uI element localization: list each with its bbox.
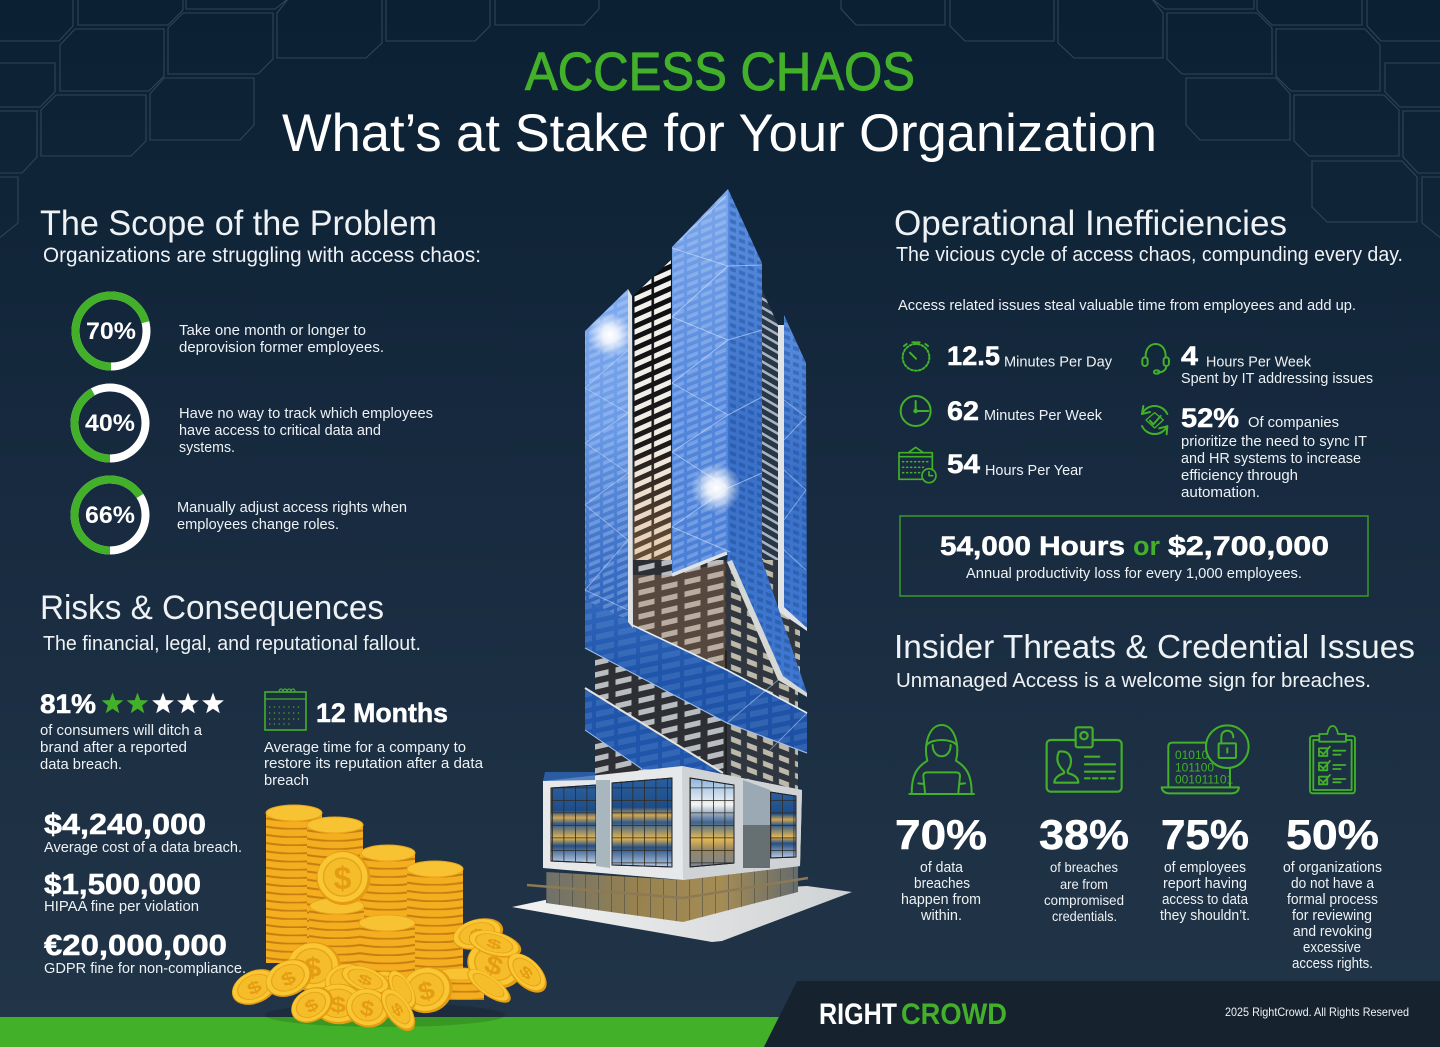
- stat: HIPAA fine: HIPAA fine per violation: [44, 898, 199, 915]
- icon: calendar: [265, 689, 306, 730]
- stat: 75% employees: they shouldn’t.: [1160, 908, 1250, 924]
- callout: annual productivity loss: or: [1133, 531, 1160, 561]
- stat: 52% of companies: [1181, 403, 1367, 501]
- stat: 81% with star rating: of consumers will ditch a: [40, 722, 203, 739]
- coin stack 6: [359, 915, 415, 993]
- stat: 75% employees: [1160, 811, 1250, 924]
- stat: 12.5 minutes per day: Minutes Per Day: [1004, 354, 1112, 370]
- callout: annual productivity loss: [900, 516, 1368, 596]
- icon: laptop with lock: 101100: [1175, 760, 1214, 774]
- donut stat: 66%: [74, 480, 146, 550]
- stat: 62 minutes per week: [947, 396, 1102, 426]
- stat: 38% credentials: credentials.: [1052, 908, 1117, 924]
- stat: 52% of companies: efficiency through: [1181, 467, 1298, 484]
- coin stack 7: [436, 968, 484, 1000]
- coin pile: $: [387, 1000, 407, 1019]
- subtitle line: What’s at Stake for Your Organization: [282, 104, 1157, 163]
- stat: HIPAA fine: [44, 869, 201, 915]
- illustration: gold coin stacks: [226, 805, 554, 1037]
- stat: 70% insider: [895, 811, 987, 924]
- icon: calendar with clock: [899, 447, 936, 483]
- icon: laptop with lock: 01010: [1175, 748, 1209, 762]
- text: 66% description: employees change roles.: [177, 516, 339, 533]
- icon: clock: [901, 396, 931, 426]
- logo: RightCrowd: RIGHT: [819, 998, 897, 1031]
- text: 70% description: deprovision former employees.: [179, 339, 384, 356]
- podium windows: [551, 778, 796, 867]
- callout: annual productivity loss: $2,700,000: [1168, 531, 1329, 561]
- stat: 52% of companies: automation.: [1181, 484, 1260, 501]
- illustration: skyscraper: [512, 189, 852, 942]
- stat: 12 months: [264, 698, 484, 789]
- stat: 50% organizations: [1283, 811, 1382, 972]
- coin pile: $: [305, 953, 321, 984]
- glass stair towers: [596, 780, 770, 868]
- heading: insider threats: Insider Threats & Credential Issues: [894, 628, 1415, 665]
- stat: HIPAA fine: $1,500,000: [44, 869, 201, 901]
- stat: 12.5 minutes per day: [947, 341, 1112, 371]
- logo: RightCrowd: [819, 998, 1007, 1031]
- text: 40% description: [179, 405, 433, 456]
- stat: 38% credentials: are from: [1060, 876, 1108, 892]
- text: 70% description: Take one month or longer to: [179, 322, 366, 339]
- stat: 54 hours per year: 54: [947, 449, 980, 479]
- glass wrap: lower band: [585, 688, 723, 773]
- ground floor glazing: [527, 865, 808, 922]
- stat: 12.5 minutes per day: 12.5: [947, 341, 1000, 371]
- donut stat: 70%: [76, 296, 146, 366]
- coin pile: $: [330, 993, 346, 1018]
- stat: 70% insider: of data: [920, 860, 964, 876]
- donut stat: 70%: 70%: [86, 318, 136, 345]
- coin pile: $: [485, 935, 503, 953]
- stat: 62 minutes per week: 62: [947, 396, 979, 426]
- stat: 52% of companies: and HR systems to increase: [1181, 450, 1361, 467]
- subheading: risks: The financial, legal, and reputational fallout.: [43, 633, 421, 655]
- subheading: scope: Organizations are struggling with access chaos:: [43, 244, 481, 267]
- icon: stopwatch: [903, 342, 929, 371]
- coin pile: $: [480, 950, 507, 982]
- stat: 81% with star rating: [40, 689, 224, 773]
- coin stack 2: [307, 817, 363, 975]
- subheading: operational inefficiencies: The vicious cycle of access chaos, compunding every day.: [896, 244, 1403, 266]
- text: 66% description: [177, 499, 407, 533]
- stat: 50% organizations: for reviewing: [1292, 908, 1372, 924]
- panel: the scope of the problem: [40, 204, 481, 550]
- stat: 50% organizations: formal process: [1287, 892, 1378, 908]
- stat: 4 hours per week: [1181, 341, 1373, 387]
- coin pile: $: [515, 963, 537, 984]
- donut stat: 40%: 40%: [85, 410, 135, 437]
- stat: 52% of companies: 52%: [1181, 403, 1239, 433]
- title line: Access Chaos: ACCESS CHAOS: [525, 42, 915, 102]
- icon: laptop with lock: [1162, 725, 1249, 793]
- icon: headset: [1142, 344, 1169, 374]
- heading: operational inefficiencies: Operational Inefficiencies: [894, 204, 1287, 243]
- stat: 62 minutes per week: Minutes Per Week: [984, 407, 1102, 424]
- stat: 52% of companies: Of companies: [1248, 414, 1339, 431]
- stat: 54 hours per year: [947, 449, 1083, 479]
- text: 40% description: Have no way to track which employees: [179, 405, 433, 422]
- coin pile: $: [302, 995, 322, 1017]
- stat: 81% with star rating: data breach.: [40, 756, 122, 773]
- heading: risks: Risks & Consequences: [40, 589, 384, 627]
- stat: 50% organizations: access rights.: [1292, 956, 1373, 972]
- text: 40% description: systems.: [179, 439, 235, 456]
- coin pile: $: [244, 976, 265, 999]
- white frame bars: [628, 289, 807, 631]
- stat: 12 months: restore its reputation after a data: [264, 755, 484, 772]
- coin pile: $: [278, 966, 299, 991]
- stat: 50% organizations: 50%: [1286, 811, 1379, 858]
- intro text: Access related issues steal valuable time from employees and add up.: [898, 298, 1356, 314]
- copyright: 2025 RightCrowd. All Rights Reserved: [1225, 1005, 1409, 1019]
- stat: GDPR fine: [44, 930, 246, 977]
- glass panel: central front face: [588, 189, 741, 575]
- upright dollar coin: $: [334, 860, 352, 896]
- coin stack 5: [309, 898, 364, 986]
- text: 70% description: [179, 322, 384, 356]
- glass panel: central side face: [727, 189, 807, 697]
- coin stack 3: [360, 845, 415, 973]
- stat: cost of a breach: [44, 809, 242, 856]
- coin pile: $: [356, 971, 375, 989]
- podium frame: [543, 766, 802, 880]
- glass wrap: left panel and band: [585, 289, 807, 753]
- coin pile: $: [468, 924, 487, 945]
- panel: risks and consequences: [40, 589, 484, 977]
- stat: 38% credentials: [1039, 811, 1129, 924]
- callout: annual productivity loss: 54,000 Hours: [940, 531, 1125, 561]
- stat: 50% organizations: excessive: [1303, 940, 1361, 956]
- stat: 50% organizations: of organizations: [1283, 860, 1382, 876]
- stat: 4 hours per week: 4: [1181, 341, 1198, 371]
- coin pile: $: [415, 975, 438, 1007]
- tower core lower floors: [595, 560, 798, 795]
- stat: 70% insider: within.: [920, 908, 962, 924]
- coin pile: $: [358, 995, 376, 1021]
- stat: 75% employees: 75%: [1161, 811, 1249, 858]
- base plate: [512, 886, 852, 942]
- stat: 70% insider: 70%: [895, 811, 987, 858]
- stat: 50% organizations: do not have a: [1291, 876, 1375, 892]
- stat: GDPR fine: GDPR fine for non-compliance.: [44, 960, 246, 977]
- stat: cost of a breach: $4,240,000: [44, 809, 206, 841]
- callout: annual productivity loss: Annual productivity loss for every 1,000 employees.: [966, 565, 1302, 582]
- subheading: insider threats: Unmanaged Access is a welcome sign for breaches.: [896, 669, 1371, 692]
- coin stack 4: [407, 861, 463, 999]
- icon: id badge: [1047, 727, 1122, 792]
- glass panel: far right: [784, 315, 807, 628]
- green footer band: [0, 1017, 779, 1047]
- stat: 38% credentials: compromised: [1044, 892, 1124, 908]
- heading: scope: The Scope of the Problem: [40, 204, 437, 243]
- stat: cost of a breach: Average cost of a data breach.: [44, 839, 242, 856]
- text: 66% description: Manually adjust access rights when: [177, 499, 407, 516]
- icon: laptop with lock: 001011101: [1175, 772, 1234, 786]
- logo: RightCrowd: CROWD: [901, 998, 1007, 1031]
- icon: hooded hacker: [909, 725, 974, 794]
- stat: 12 months: 12 Months: [316, 698, 448, 728]
- coin stack 1: [266, 805, 322, 963]
- icon: clipboard checklist: [1310, 726, 1355, 793]
- footer panel: [764, 981, 1440, 1047]
- panel: operational inefficiencies: [894, 204, 1403, 596]
- stat: 38% credentials: 38%: [1039, 811, 1129, 858]
- stat: 54 hours per year: Hours Per Year: [985, 462, 1083, 479]
- stat: 75% employees: access to data: [1162, 892, 1249, 908]
- stat: 75% employees: of employees: [1164, 860, 1246, 876]
- text: 40% description: have access to critical data and: [179, 422, 381, 439]
- stat: 4 hours per week: Spent by IT addressing issues: [1181, 370, 1373, 387]
- stat: 12 months: Average time for a company to: [264, 739, 466, 756]
- stat: 81% with star rating: 81%: [40, 689, 96, 719]
- stat: 38% credentials: of breaches: [1050, 859, 1118, 875]
- stat: 70% insider: happen from: [901, 892, 981, 908]
- coin pile: [226, 913, 554, 1037]
- stat: 4 hours per week: Hours Per Week: [1206, 354, 1311, 370]
- upright dollar coin: [316, 851, 370, 905]
- donut stat: 66%: 66%: [85, 502, 135, 529]
- stat: 70% insider: breaches: [914, 876, 970, 892]
- stat: 52% of companies: prioritize the need to sync IT: [1181, 433, 1367, 450]
- stat: 81% with star rating: brand after a reported: [40, 739, 187, 756]
- icon: sync check: [1142, 406, 1167, 434]
- stat: 50% organizations: and revoking: [1293, 924, 1372, 940]
- donut stat: 40%: [74, 388, 146, 458]
- stat: 75% employees: report having: [1163, 876, 1247, 892]
- stat: 12 months: breach: [264, 772, 309, 789]
- tower core upper floors: [633, 259, 800, 690]
- title: [282, 42, 1157, 163]
- stat: GDPR fine: €20,000,000: [44, 930, 227, 962]
- panel: insider threats and credential issues: [894, 628, 1415, 972]
